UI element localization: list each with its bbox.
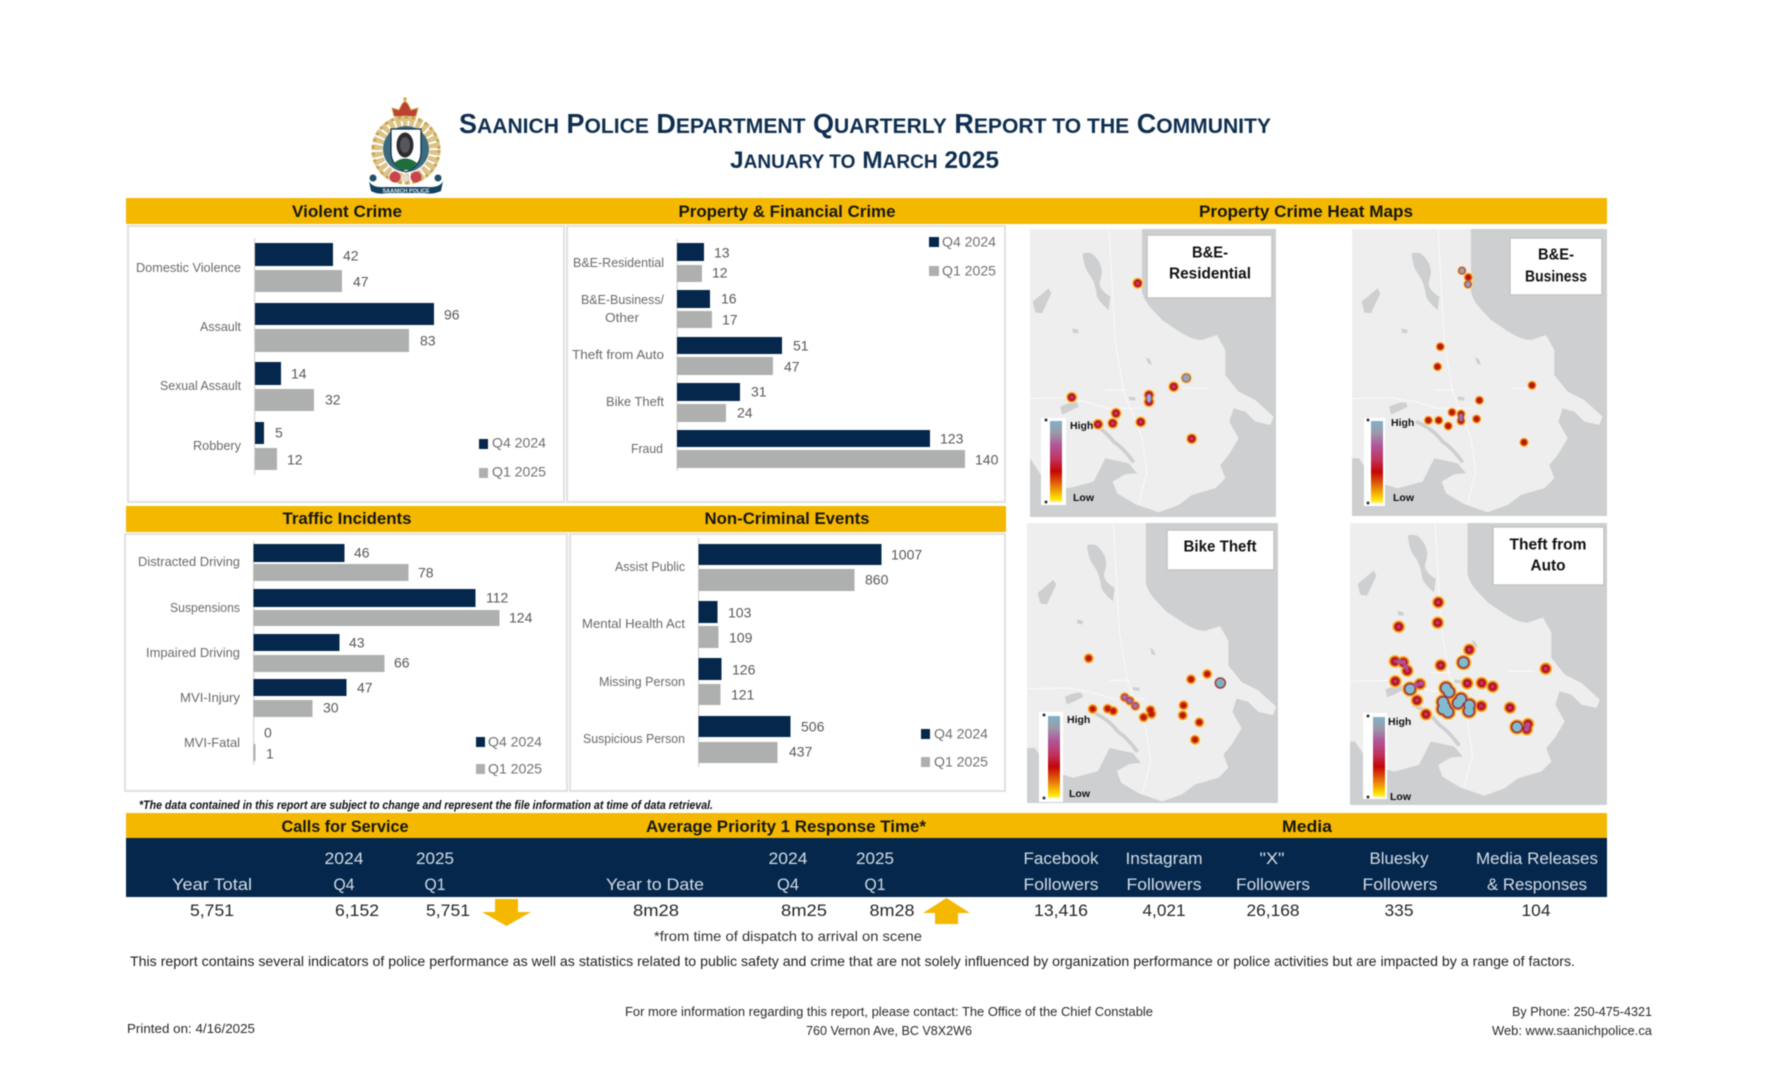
color scale legend: High (1388, 716, 1411, 728)
icon: Saanich Police crest: SAANICH POLICE (382, 188, 430, 194)
table header band: 2025 (856, 849, 894, 868)
map label (1510, 238, 1602, 295)
table header band: Instagram (1126, 849, 1202, 868)
panel: traffic incidents chart: 78 (418, 564, 434, 580)
hot spot (1182, 374, 1190, 382)
panel: property and financial crime chart: 13 (714, 244, 730, 260)
map label: B&E- (1192, 245, 1228, 262)
heading: Violent Crime: Violent Crime (292, 202, 402, 221)
section header bar: bottom table (126, 813, 1607, 838)
panel: traffic incidents chart: 0 (264, 724, 272, 740)
panel: non-criminal events chart: 437 (789, 743, 813, 759)
footer: contact info: For more information regarding this report, please contact: The Office of the Chief Constable (625, 1004, 1153, 1019)
table header band: Media Releases (1476, 849, 1598, 868)
table header band: 2025 (416, 849, 454, 868)
panel: property and financial crime chart: B&E-Residential (573, 255, 664, 270)
table header band: "X" (1260, 849, 1284, 868)
legend (479, 434, 546, 479)
heat map: B&E-Residential (1030, 228, 1276, 518)
panel: traffic incidents chart: 1 (266, 745, 274, 761)
table header band: Bluesky (1370, 849, 1429, 868)
footer: phone and web: Web: www.saanichpolice.ca (1492, 1023, 1653, 1038)
panel: property and financial crime chart: 51 (793, 337, 809, 353)
panel: violent crime chart: Assault (200, 319, 241, 334)
color scale legend: High (1391, 417, 1414, 429)
color scale legend: Low (1393, 492, 1415, 504)
panel: non-criminal events chart: Missing Person (599, 674, 685, 689)
table header band: & Responses (1487, 875, 1587, 894)
panel: property and financial crime chart: 47 (784, 358, 800, 374)
table header band: Q1 (424, 875, 446, 894)
table header band: Q4 (334, 875, 354, 894)
heat map: B&E-Business (1352, 228, 1608, 516)
panel: traffic incidents chart (125, 534, 567, 791)
arrow: calls for service down (482, 899, 531, 926)
panel: traffic incidents chart: MVI-Fatal (184, 735, 240, 750)
table values row: 104 (1522, 901, 1550, 920)
panel: violent crime chart (128, 226, 564, 502)
arrow: response time up (923, 898, 970, 924)
color scale legend (1363, 713, 1412, 803)
panel: traffic incidents chart: 43 (349, 634, 365, 650)
title: SAANICH POLICE DEPARTMENT QUARTERLY REPORT TO THE COMMUNITY (459, 108, 1271, 139)
data disclaimer: *The data contained in this report are subject to change and represent the file information at time of data retrieval. (139, 798, 713, 812)
panel: property and financial crime chart: B&E-Business/ (581, 292, 664, 307)
panel: non-criminal events chart: 121 (731, 686, 755, 702)
panel: property and financial crime chart: 12 (712, 264, 728, 280)
legend: Q1 2025 (492, 463, 546, 479)
table values row: 8m25 (781, 901, 827, 920)
heading: Media: Media (1282, 817, 1333, 836)
panel: violent crime chart: 32 (325, 391, 341, 407)
panel: traffic incidents chart: 124 (509, 609, 533, 625)
table header band: Year to Date (606, 875, 704, 894)
table values row (190, 901, 1550, 920)
panel: traffic incidents chart: 66 (394, 654, 410, 670)
color scale legend: High (1070, 420, 1093, 432)
report disclaimer: This report contains several indicators of police performance as well as statistics related to public safety and crime that are not solely influenced by organization performance or police activities but are impacted by a range of factors. (130, 953, 1575, 969)
panel: traffic incidents chart: 46 (354, 544, 370, 560)
panel: property and financial crime chart: 16 (721, 290, 737, 306)
map label: Auto (1530, 558, 1566, 575)
section header bar: second row (126, 506, 1006, 532)
panel: non-criminal events chart: 1007 (891, 546, 922, 562)
panel: property and financial crime chart: Bike Theft (606, 394, 664, 409)
legend (921, 725, 988, 769)
panel: traffic incidents chart: Impaired Driving (146, 645, 240, 660)
legend: Q4 2024 (934, 725, 988, 741)
panel: property and financial crime chart: 17 (722, 311, 738, 327)
footer: contact info (625, 1004, 1153, 1038)
heading: Property Crime Heat Maps: Property Crime Heat Maps (1199, 202, 1413, 221)
panel: non-criminal events chart: 109 (729, 629, 753, 645)
icon: Saanich Police crest (369, 97, 443, 194)
panel: property and financial crime chart: Theft from Auto (572, 347, 664, 362)
hot spot (1465, 281, 1471, 287)
table values row: 6,152 (335, 901, 379, 920)
table header band: Year Total (172, 875, 252, 894)
legend: Q1 2025 (488, 760, 542, 776)
color scale legend (1041, 418, 1095, 505)
legend (929, 233, 996, 278)
table header band: Facebook (1024, 849, 1099, 868)
panel: violent crime chart: 47 (353, 273, 369, 289)
panel: non-criminal events chart: 103 (728, 604, 752, 620)
panel: property and financial crime chart: 24 (737, 404, 753, 420)
map label: Bike Theft (1184, 539, 1257, 556)
heat map: Bike Theft (1026, 522, 1278, 804)
table values row: 335 (1384, 901, 1414, 920)
panel: non-criminal events chart: Suspicious Person (583, 731, 685, 746)
panel: property and financial crime chart: 140 (975, 451, 999, 467)
panel: non-criminal events chart: 860 (865, 571, 889, 587)
panel: non-criminal events chart: Mental Health Act (582, 616, 685, 631)
map label: Business (1525, 269, 1587, 286)
legend: Q4 2024 (942, 233, 996, 249)
panel: property and financial crime chart: 123 (940, 430, 964, 446)
panel: traffic incidents chart: 112 (486, 589, 509, 605)
panel: traffic incidents chart: Distracted Driving (138, 554, 240, 569)
panel: property and financial crime chart: 31 (751, 383, 767, 399)
panel: violent crime chart: 96 (444, 306, 460, 322)
color scale legend: Low (1073, 492, 1095, 504)
heat map: Theft from Auto (1350, 522, 1608, 806)
footer: printed date: Printed on: 4/16/2025 (127, 1021, 255, 1036)
color scale legend (1039, 712, 1091, 802)
map label (1147, 235, 1272, 298)
footer: phone and web: By Phone: 250-475-4321 (1512, 1004, 1652, 1019)
table header band: Followers (1236, 875, 1310, 894)
panel: traffic incidents chart: 47 (357, 679, 373, 695)
hot spot (1459, 267, 1465, 274)
heading: Property and Financial Crime: Property & Financial Crime (678, 202, 896, 221)
table values row: 8m28 (633, 901, 679, 920)
panel: violent crime chart: 12 (287, 451, 303, 467)
panel: traffic incidents chart: MVI-Injury (180, 690, 241, 705)
panel: non-criminal events chart: Assist Public (615, 559, 685, 574)
map label (1167, 530, 1274, 570)
section header bar: top row (126, 198, 1607, 224)
table header band: Followers (1024, 875, 1098, 894)
legend: Q1 2025 (942, 262, 996, 278)
response time footnote: *from time of dispatch to arrival on scene (654, 928, 922, 944)
legend: Q4 2024 (488, 733, 542, 749)
table values row: 4,021 (1142, 901, 1186, 920)
panel: non-criminal events chart (570, 534, 1005, 791)
color scale legend: High (1067, 714, 1090, 726)
subtitle: date range: JANUARY TO MARCH 2025 (730, 147, 999, 174)
legend (476, 733, 542, 776)
map label: B&E- (1538, 247, 1574, 264)
panel: violent crime chart: Sexual Assault (160, 378, 241, 393)
hot spot (1146, 394, 1152, 403)
legend: Q4 2024 (492, 434, 546, 450)
panel: property and financial crime chart: Fraud (631, 441, 663, 456)
panel: traffic incidents chart: Suspensions (170, 600, 240, 615)
table values row: 5,751 (426, 901, 470, 920)
panel: violent crime chart: 42 (343, 247, 359, 263)
panel: non-criminal events chart: 506 (801, 718, 825, 734)
footer: contact info: 760 Vernon Ave, BC V8X2W6 (806, 1023, 972, 1038)
heading: Calls for Service: Calls for Service (282, 817, 408, 836)
color scale legend: Low (1390, 791, 1412, 803)
heading: Average Priority 1 Response Time: Average Priority 1 Response Time* (646, 817, 926, 836)
panel: non-criminal events chart: 126 (732, 661, 756, 677)
heading: Traffic Incidents: Traffic Incidents (282, 509, 412, 528)
panel: traffic incidents chart: 30 (323, 699, 339, 715)
panel: property and financial crime chart: Other (605, 310, 640, 325)
table header band: Followers (1362, 875, 1438, 894)
heading: Non-Criminal Events: Non-Criminal Events (704, 509, 870, 528)
panel: property and financial crime chart (567, 226, 1005, 502)
table header band: Followers (1126, 875, 1202, 894)
table values row: 26,168 (1246, 901, 1300, 920)
panel: violent crime chart: Domestic Violence (136, 260, 241, 275)
panel: violent crime chart: 83 (420, 332, 436, 348)
hot spot (1458, 413, 1464, 422)
table header band: 2024 (324, 849, 364, 868)
table values row: 13,416 (1034, 901, 1088, 920)
table values row: 5,751 (190, 901, 234, 920)
panel: violent crime chart: 14 (291, 365, 307, 381)
table values row: 8m28 (870, 901, 914, 920)
panel: violent crime chart: 5 (275, 424, 283, 440)
hot spot (1215, 678, 1225, 688)
panel: violent crime chart: Robbery (193, 438, 241, 453)
map label: Theft from (1510, 537, 1586, 554)
table header band (126, 838, 1607, 897)
map label (1493, 527, 1604, 585)
footer: phone and web (1492, 1004, 1653, 1038)
table header band: Q1 (864, 875, 886, 894)
color scale legend (1364, 417, 1415, 506)
map label: Residential (1169, 266, 1251, 283)
table header band: Q4 (777, 875, 799, 894)
legend: Q1 2025 (934, 753, 988, 769)
color scale legend: Low (1069, 788, 1091, 800)
table header band: 2024 (768, 849, 808, 868)
